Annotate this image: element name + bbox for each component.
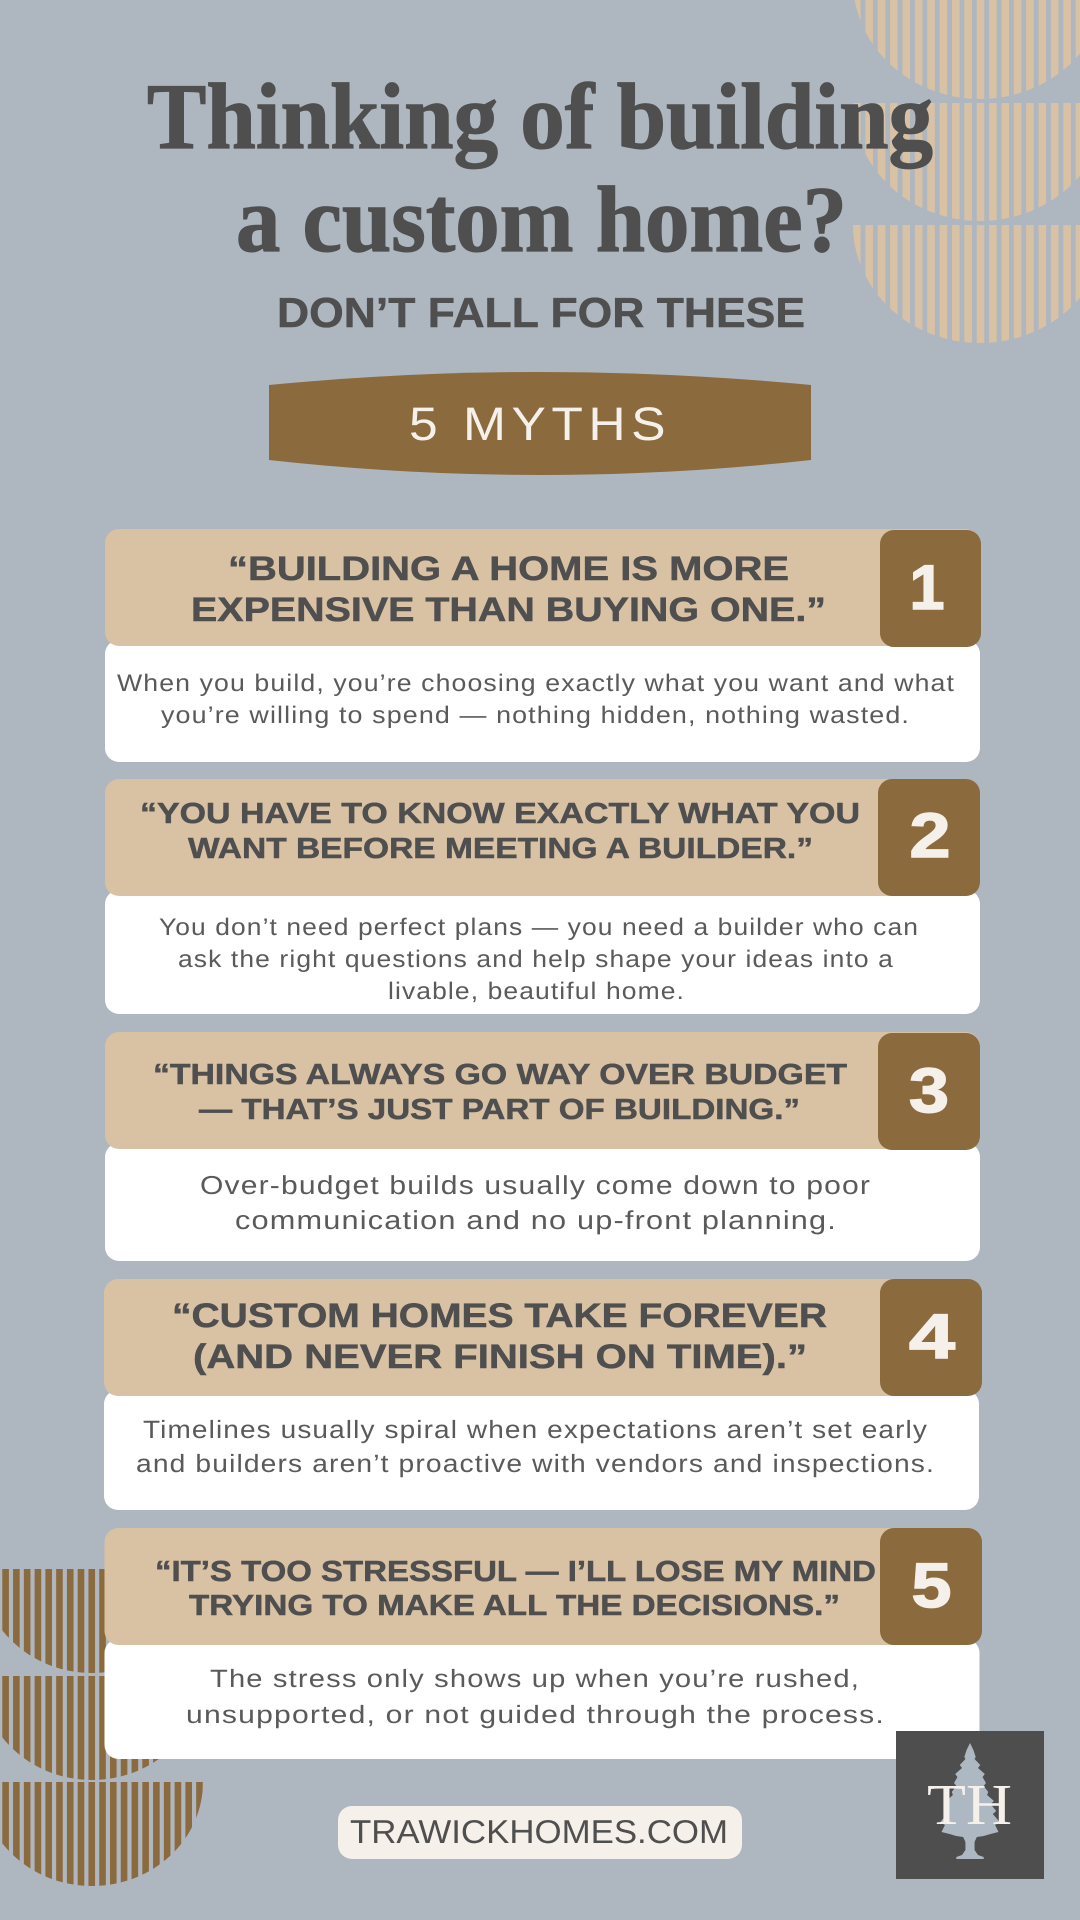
- myth 3 heading: “THINGS ALWAYS GO WAY OVER BUDGET: [153, 1059, 847, 1091]
- myth 5 number badge: 5: [912, 1551, 952, 1621]
- title: Thinking of building: [147, 65, 933, 169]
- myth 1 number badge: 1: [909, 553, 945, 623]
- myth 1 heading: EXPENSIVE THAN BUYING ONE.”: [191, 591, 826, 629]
- website link pill: [338, 1806, 742, 1859]
- myth 4 heading: [172, 1297, 827, 1376]
- title: a custom home?: [236, 168, 847, 272]
- myth 2 body: livable, beautiful home.: [388, 978, 685, 1005]
- myth 5 body: The stress only shows up when you’re rushed,: [210, 1665, 860, 1693]
- myth 3 number badge: 3: [909, 1056, 949, 1126]
- myth 2 heading: WANT BEFORE MEETING A BUILDER.”: [188, 833, 813, 865]
- myth 1 number badge: [880, 530, 981, 647]
- myth 2 body: ask the right questions and help shape your ideas into a: [178, 946, 894, 973]
- myth 2 body: [159, 914, 919, 1005]
- myth 1 heading: “BUILDING A HOME IS MORE: [228, 550, 789, 588]
- panel: myth 1: [105, 529, 981, 762]
- myth 1 body: [117, 670, 955, 729]
- myth 3 body: Over-budget builds usually come down to poor: [200, 1170, 871, 1200]
- banner: 5 myths: [269, 372, 811, 475]
- myth 5 heading: [155, 1556, 876, 1622]
- myth 2 heading: “YOU HAVE TO KNOW EXACTLY WHAT YOU: [140, 798, 860, 830]
- myth 3 number badge: [878, 1033, 980, 1150]
- logo monogram: TH: [927, 1772, 1012, 1837]
- myth 5 number badge: [880, 1528, 982, 1645]
- subtitle: DON’T FALL FOR THESE: [277, 289, 805, 336]
- title: [147, 65, 933, 272]
- myth 3 heading: — THAT’S JUST PART OF BUILDING.”: [199, 1094, 800, 1126]
- myth 1 heading: [191, 550, 826, 629]
- myth 5 heading: “IT’S TOO STRESSFUL — I’LL LOSE MY MIND: [155, 1556, 876, 1588]
- logo: TH pine tree: [896, 1731, 1044, 1879]
- myth 4 body: [136, 1416, 935, 1478]
- myth 2 number badge: [878, 779, 980, 896]
- myth 3 body: [200, 1170, 871, 1235]
- decoration: brown striped semicircles, bottom left: [2, 1565, 203, 1890]
- icon: pine tree: [940, 1743, 1000, 1859]
- panel: myth 2: [105, 779, 980, 1014]
- myth 2 number badge: 2: [910, 801, 950, 871]
- myth 5 body: unsupported, or not guided through the process.: [186, 1701, 885, 1729]
- panel: myth 3: [105, 1032, 980, 1261]
- myth 4 heading: (AND NEVER FINISH ON TIME).”: [193, 1338, 807, 1376]
- myth 3 heading: [153, 1059, 847, 1126]
- myth 5 heading: TRYING TO MAKE ALL THE DECISIONS.”: [189, 1590, 840, 1622]
- myth 5 body: [186, 1665, 885, 1729]
- myth 1 body: you’re willing to spend — nothing hidden, nothing wasted.: [161, 702, 910, 729]
- panel: myth 4: [104, 1279, 982, 1510]
- panel: myth 5: [104, 1528, 982, 1759]
- banner: 5 myths: 5 MYTHS: [409, 397, 671, 450]
- myth 4 number badge: [880, 1279, 982, 1396]
- decoration: tan striped semicircles, top right: [853, 0, 1080, 345]
- myth 4 heading: “CUSTOM HOMES TAKE FOREVER: [172, 1297, 827, 1335]
- myth 4 number badge: 4: [909, 1302, 955, 1372]
- myth 4 body: and builders aren’t proactive with vendors and inspections.: [136, 1450, 935, 1478]
- myth 1 body: When you build, you’re choosing exactly what you want and what: [117, 670, 955, 697]
- myth 4 body: Timelines usually spiral when expectations aren’t set early: [143, 1416, 928, 1444]
- myth 2 heading: [140, 798, 860, 865]
- myth 3 body: communication and no up-front planning.: [235, 1205, 837, 1235]
- myth 2 body: You don’t need perfect plans — you need a builder who can: [159, 914, 919, 941]
- website link pill: TRAWICKHOMES.COM: [350, 1813, 728, 1850]
